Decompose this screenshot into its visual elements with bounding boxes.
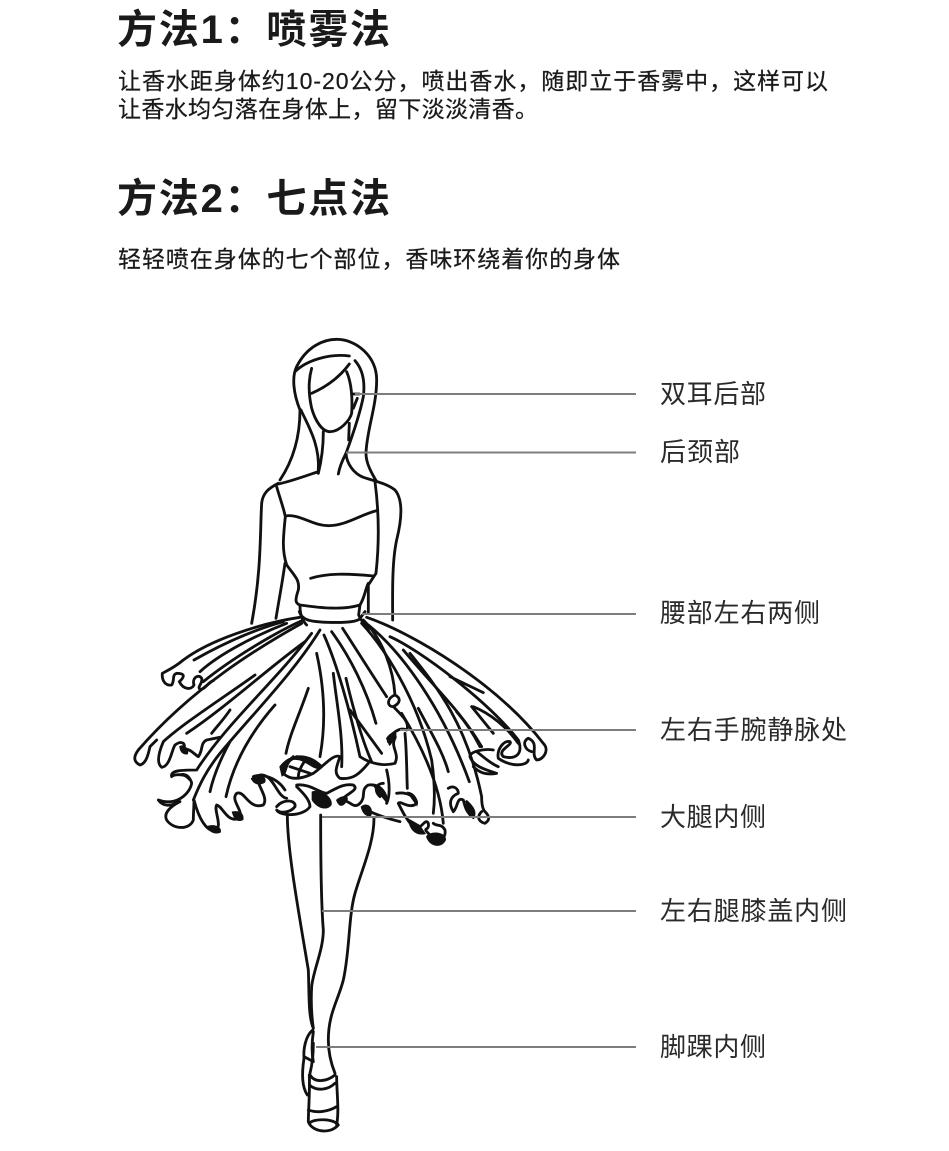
right folds [363,620,408,742]
callout: inner knee: 左右腿膝盖内侧 [660,896,847,926]
right upper tier [367,617,546,765]
heading: method 1: 方法1：喷雾法 [117,8,390,52]
figure upper body [252,339,401,630]
callout: wrist veins: 左右手腕静脉处 [660,715,847,745]
text block: method 1 description: 让香水均匀落在身体上，留下淡淡清香。 [118,96,538,122]
left lower tier [193,630,320,800]
figure legs and shoe [287,815,374,1131]
blobs [179,732,475,846]
figure: woman in tutu skirt [135,339,546,1131]
text block: method 2 description: 轻轻喷在身体的七个部位，香味环绕着你的身体 [118,246,620,272]
callout: both sides of waist: 腰部左右两侧 [660,598,820,628]
left middle tier [135,623,302,765]
figure tutu skirt [135,612,546,846]
callout: back of neck: 后颈部 [660,437,740,467]
left upper tier [162,617,300,689]
centre folds [317,635,396,767]
callout: behind the ears: 双耳后部 [660,379,766,409]
text block: method 1 description: 让香水距身体约10-20公分，喷出香水，随即立于香雾中，这样可以 [118,68,828,94]
callout: inner thigh: 大腿内侧 [660,802,766,832]
heading: method 2: 方法2：七点法 [117,177,390,221]
right ruffles [397,793,445,839]
text block: method 1 description [118,68,828,122]
callout: inner ankle: 脚踝内侧 [660,1032,766,1062]
